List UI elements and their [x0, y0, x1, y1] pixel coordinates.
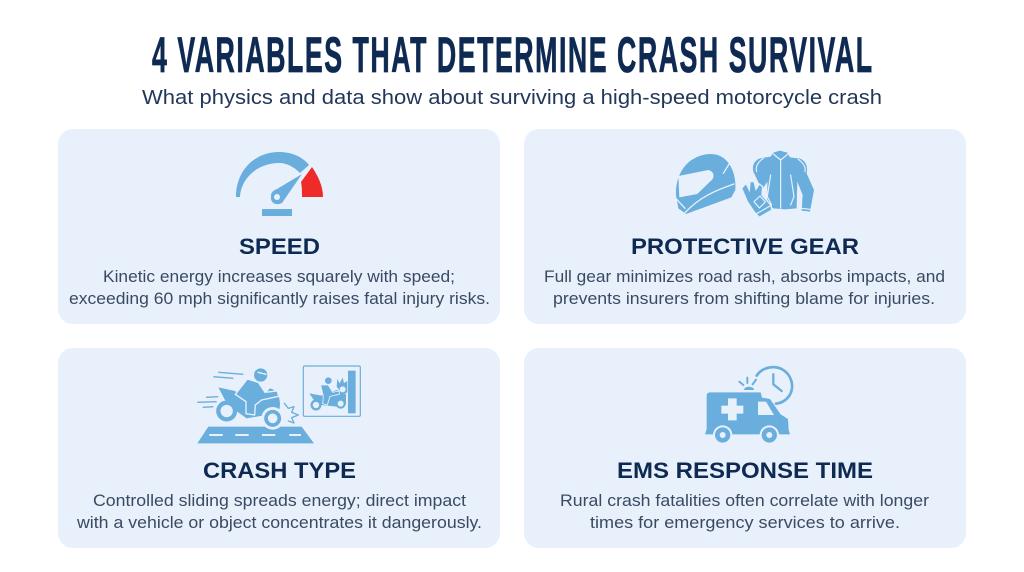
text: crash type description: with a vehicle or object concentrates it dangerously.: [76, 514, 482, 532]
icon: motorcycle crash: [197, 366, 360, 443]
icon: rider and motorcycle: [197, 368, 284, 430]
icon: glove: [742, 181, 772, 217]
text: ems description: Rural crash fatalities often correlate with longer: [560, 492, 930, 510]
icon: ambulance: [705, 392, 790, 444]
heading: ems response time: EMS RESPONSE TIME: [617, 458, 873, 483]
panel: crash type: [58, 348, 500, 548]
text: protective gear description: Full gear minimizes road rash, absorbs impacts, and: [544, 268, 945, 286]
panel: protective gear: [524, 129, 966, 324]
text: protective gear description: [544, 268, 945, 308]
subtitle: What physics and data show about surviving a high-speed motorcycle crash: [142, 87, 882, 109]
icon: jacket: [753, 151, 814, 212]
icon: helmet: [676, 154, 735, 214]
text: ems description: times for emergency services to arrive.: [590, 514, 900, 532]
icon: inset direct impact: [303, 366, 360, 416]
icon: clock: [757, 367, 792, 404]
heading: protective gear: PROTECTIVE GEAR: [631, 234, 859, 259]
icon: ambulance and clock: [705, 367, 792, 444]
icon: impact burst: [284, 403, 298, 423]
text: protective gear description: prevents insurers from shifting blame for injuries.: [553, 290, 935, 308]
text: speed description: exceeding 60 mph significantly raises fatal injury risks.: [69, 290, 490, 308]
text: crash type description: Controlled sliding spreads energy; direct impact: [93, 492, 466, 510]
panel: speed: [58, 129, 500, 324]
heading: crash type: CRASH TYPE: [203, 458, 356, 483]
text: crash type description: [76, 492, 482, 532]
icon: speedometer: [236, 152, 323, 216]
text: speed description: Kinetic energy increases squarely with speed;: [103, 268, 455, 286]
title: 4 VARIABLES THAT DETERMINE CRASH SURVIVAL: [152, 28, 872, 83]
icon: siren: [739, 378, 756, 390]
icon: helmet, glove and jacket: [676, 151, 814, 217]
icon: road: [197, 427, 314, 443]
text: ems description: [560, 492, 930, 532]
panel: ems response time: [524, 348, 966, 548]
heading: speed: SPEED: [239, 234, 320, 259]
text: speed description: [69, 268, 490, 308]
